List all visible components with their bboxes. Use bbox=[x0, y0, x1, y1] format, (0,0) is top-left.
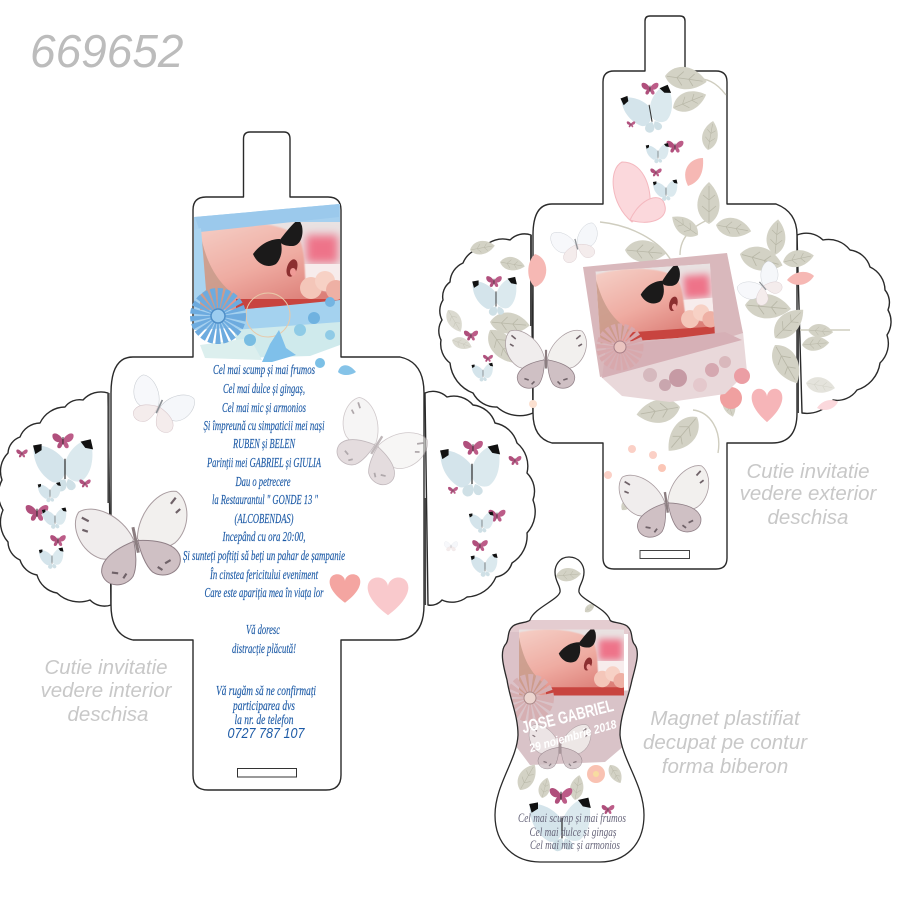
invitation text: Parinții mei GABRIEL și GIULIA bbox=[206, 455, 321, 470]
caption: magnet: decupat pe contur bbox=[643, 731, 808, 754]
invitation text: Cel mai scump și mai frumos bbox=[213, 362, 315, 377]
light pink heart bbox=[368, 578, 408, 615]
large grey butterfly bbox=[72, 489, 199, 591]
invitation text: 0727 787 107 bbox=[228, 725, 305, 742]
caption: exterior view: Cutie invitatie bbox=[746, 460, 870, 483]
verse on magnet: Cel mai dulce și gingaș bbox=[530, 825, 617, 839]
caption: magnet: forma biberon bbox=[662, 755, 788, 778]
left scalloped flap bbox=[0, 392, 111, 606]
verse on magnet: Cel mai mic și armonios bbox=[530, 838, 620, 852]
slot bbox=[640, 550, 690, 558]
verse on magnet bbox=[518, 811, 626, 852]
panel: box exterior view bbox=[439, 16, 891, 569]
invitation text: Și sunteți poftiți să beți un pahar de șampanie bbox=[183, 548, 345, 563]
pink photo frame bbox=[583, 253, 750, 402]
box body outline bbox=[533, 16, 797, 569]
floral stems bbox=[600, 78, 850, 453]
invitation text: Incepând cu ora 20:00, bbox=[222, 529, 306, 544]
caption: exterior view: deschisa bbox=[768, 506, 848, 529]
icon: blue daisy bbox=[203, 301, 233, 331]
right scalloped flap bbox=[425, 391, 535, 605]
invitation text: Cel mai dulce și gingaș, bbox=[223, 381, 305, 396]
invitation text: Vă doresc bbox=[246, 622, 280, 637]
salmon heart bbox=[330, 574, 360, 603]
caption: interior view: vedere interior bbox=[40, 679, 173, 702]
left scalloped flap bbox=[439, 234, 533, 416]
invitation text: În cinstea fericitului eveniment bbox=[209, 567, 319, 582]
invitation text: la nr. de telefon bbox=[234, 712, 294, 727]
date on magnet: 29 noiembrie 2018 bbox=[527, 717, 618, 756]
foliage bbox=[443, 64, 836, 513]
invitation text: Dau o petrecere bbox=[235, 474, 291, 489]
butterflies on left flap bbox=[16, 433, 93, 569]
product code: 669652 bbox=[30, 25, 184, 77]
caption: magnet: Magnet plastifiat bbox=[650, 707, 801, 730]
grey butterfly on left side bbox=[506, 330, 586, 388]
caption: interior view: Cutie invitatie bbox=[44, 656, 168, 679]
name on magnet: JOSE GABRIEL bbox=[520, 696, 616, 737]
butterflies on right flap bbox=[440, 441, 521, 577]
invitation text: distracție plăcută! bbox=[232, 641, 296, 656]
icon: pale blue butterfly bbox=[549, 222, 603, 266]
blue and pink butterflies column bbox=[620, 83, 683, 201]
invitation text: Care este apariția mea în viața lor bbox=[204, 585, 324, 600]
right scalloped flap bbox=[797, 233, 891, 413]
invitation text: Vă rugăm să ne confirmați bbox=[216, 683, 316, 698]
flap slits bbox=[108, 393, 425, 605]
bottle fill bbox=[495, 557, 644, 862]
blue photo frame bbox=[194, 204, 356, 375]
invitation text: Cel mai mic și armonios bbox=[222, 400, 306, 415]
caption: exterior view: vedere exterior bbox=[740, 482, 878, 505]
icon: pale butterfly on right side bbox=[735, 259, 790, 312]
panel: box interior view bbox=[0, 132, 535, 790]
icon: blue butterfly bbox=[262, 330, 296, 362]
invitation text: participarea dvs bbox=[232, 698, 295, 713]
bottle artwork bbox=[500, 567, 640, 851]
invitation text bbox=[183, 362, 345, 742]
panel: bottle magnet bbox=[495, 557, 644, 862]
heart bbox=[752, 389, 782, 422]
bottle outline bbox=[495, 557, 644, 862]
bottom grey butterfly bbox=[617, 464, 715, 541]
invitation text: (ALCOBENDAS) bbox=[234, 511, 294, 526]
butterflies on left flap bbox=[464, 276, 517, 382]
box body outline bbox=[111, 132, 424, 790]
invitation text: RUBEN și BELEN bbox=[232, 436, 296, 451]
icon: small blue butterfly bbox=[338, 365, 356, 375]
icon: pink line butterfly bbox=[613, 162, 665, 222]
pale butterfly top left bbox=[122, 373, 197, 439]
pale butterfly right bbox=[321, 394, 432, 496]
flap slits bbox=[531, 235, 798, 413]
invitation text: la Restaurantul " GONDE 13 " bbox=[212, 492, 318, 507]
caption: interior view: deschisa bbox=[68, 703, 148, 726]
verse on magnet: Cel mai scump și mai frumos bbox=[518, 811, 626, 825]
invitation text: Și împreună cu simpaticii mei nași bbox=[204, 418, 325, 433]
pink flowers and buds bbox=[528, 158, 838, 479]
slot bbox=[238, 768, 296, 777]
